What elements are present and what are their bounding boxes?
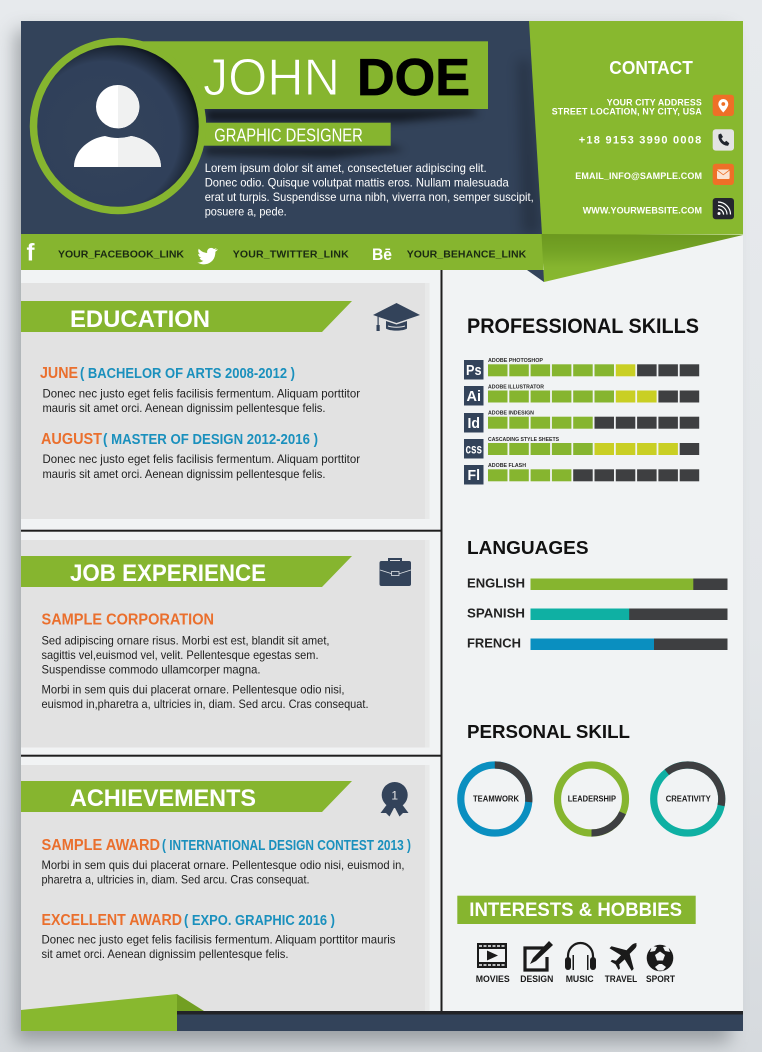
skill: css: css bbox=[466, 442, 482, 456]
language: english: ENGLISH bbox=[467, 576, 525, 591]
entry: sample corporation: sagittis vel,euismod vel, velit. Pellentesque egestas sem. bbox=[42, 648, 318, 662]
intro paragraph: erat ut turpis. Suspendisse urna nibh, viverra non, semper suscipit, bbox=[205, 190, 534, 204]
icon: briefcase bbox=[380, 559, 411, 586]
language: spanish bbox=[467, 606, 728, 621]
skill: flash bbox=[464, 463, 699, 484]
social bar bbox=[21, 234, 544, 282]
icon: sport bbox=[646, 945, 675, 984]
skill: photoshop: Ps bbox=[466, 362, 482, 379]
icon: music: MUSIC bbox=[566, 974, 594, 984]
entry: master: AUGUST bbox=[41, 431, 102, 448]
language: french: FRENCH bbox=[467, 636, 521, 651]
panel: languages bbox=[467, 537, 728, 651]
skill: indesign: Id bbox=[468, 415, 480, 432]
skill: indesign: ADOBE INDESIGN bbox=[488, 411, 534, 417]
icon: twitter bbox=[197, 248, 218, 264]
entry: sample corporation: SAMPLE CORPORATION bbox=[42, 612, 214, 628]
icon: graduation cap bbox=[373, 303, 420, 331]
entry: sample award: Morbi in sem quis dui placerat ornare. Pellentesque odio nisi, euismod in, bbox=[42, 858, 404, 872]
entry: bachelor: Donec nec justo eget felis facilisis fermentum. Aliquam porttitor bbox=[42, 386, 360, 400]
intro paragraph: posuere a, pede. bbox=[205, 204, 287, 218]
intro paragraph: Lorem ipsum dolor sit amet, consectetuer adipiscing elit. bbox=[205, 161, 487, 175]
icon: phone bbox=[713, 129, 734, 151]
entry: sample corporation: euismod in,pharetra a, ultricies in, diam. Sed arcu. Cras consequat. bbox=[42, 697, 368, 711]
skill: illustrator: Ai bbox=[466, 388, 481, 405]
heading banner: INTERESTS & HOBBIES bbox=[469, 900, 682, 921]
heading: JOB EXPERIENCE bbox=[70, 560, 266, 587]
entry: sample award: SAMPLE AWARD bbox=[42, 837, 160, 854]
entry: bachelor: mauris sit amet orci. Aenean dignissim pellentesque felis. bbox=[42, 401, 326, 415]
heading: PERSONAL SKILL bbox=[467, 721, 630, 742]
language: french bbox=[467, 636, 728, 651]
twitter link: YOUR_TWITTER_LINK bbox=[233, 249, 349, 261]
entry: excellent award bbox=[42, 912, 396, 961]
entry: sample corporation: Morbi in sem quis dui placerat ornare. Pellentesque odio nisi, bbox=[42, 682, 344, 696]
icon: email bbox=[713, 164, 734, 185]
entry: bachelor: JUNE bbox=[40, 365, 78, 382]
language: english bbox=[467, 576, 728, 591]
ring: teamwork: TEAMWORK bbox=[473, 795, 519, 804]
skill: css: CASCADING STYLE SHEETS bbox=[488, 437, 559, 443]
heading: EDUCATION bbox=[70, 306, 210, 333]
entry: master bbox=[41, 431, 360, 481]
header panel bbox=[21, 21, 543, 234]
job title: GRAPHIC DESIGNER bbox=[214, 126, 363, 146]
ring: creativity: CREATIVITY bbox=[666, 795, 711, 804]
icon: travel bbox=[605, 943, 638, 984]
icon: facebook: f bbox=[26, 240, 36, 266]
entry: sample award bbox=[42, 837, 411, 886]
heading: ACHIEVEMENTS bbox=[70, 785, 256, 812]
heading: PROFESSIONAL SKILLS bbox=[467, 315, 699, 338]
entry: bachelor bbox=[40, 365, 360, 415]
skill: photoshop: ADOBE PHOTOSHOP bbox=[488, 358, 543, 364]
ring: leadership: LEADERSHIP bbox=[568, 795, 617, 804]
entry: master: mauris sit amet orci. Aenean dignissim pellentesque felis. bbox=[42, 467, 326, 481]
job title ribbon bbox=[190, 123, 391, 146]
entry: bachelor: ( BACHELOR OF ARTS 2008-2012 ) bbox=[80, 366, 295, 382]
panel: interests and hobbies bbox=[457, 896, 696, 984]
behance link: YOUR_BEHANCE_LINK bbox=[407, 249, 527, 261]
icon: behance: Bē bbox=[372, 245, 392, 264]
skill: indesign bbox=[464, 411, 699, 432]
skill: css bbox=[464, 437, 699, 458]
name banner bbox=[140, 41, 488, 109]
address bbox=[552, 97, 702, 117]
icon: award medal bbox=[380, 782, 408, 816]
entry: sample corporation: Suspendisse commodo ullamcorper magna. bbox=[42, 662, 260, 676]
entry: excellent award: Donec nec justo eget felis facilisis fermentum. Aliquam porttitor mauris bbox=[42, 932, 396, 946]
icon: movies: MOVIES bbox=[476, 974, 510, 984]
entry: excellent award: EXCELLENT AWARD bbox=[42, 912, 182, 929]
skill: illustrator: ADOBE ILLUSTRATOR bbox=[488, 385, 544, 391]
profile portrait bbox=[34, 42, 202, 210]
icon: sport: SPORT bbox=[646, 974, 675, 984]
entry: excellent award: ( EXPO. GRAPHIC 2016 ) bbox=[184, 913, 335, 929]
section banner bbox=[21, 781, 352, 812]
entry: sample corporation bbox=[42, 612, 368, 711]
footer strip bbox=[21, 994, 743, 1031]
ring: teamwork bbox=[461, 765, 529, 833]
panel: professional skills bbox=[464, 315, 699, 484]
entry: sample award: ( INTERNATIONAL DESIGN CONTEST 2013 ) bbox=[162, 838, 411, 854]
address: STREET LOCATION, NY CITY, USA bbox=[552, 107, 702, 117]
panel: achievements bbox=[21, 765, 430, 1012]
contact heading: CONTACT bbox=[609, 58, 693, 78]
panel: personal skill bbox=[461, 721, 722, 833]
heading banner bbox=[457, 896, 696, 924]
entry: sample corporation: Sed adipiscing ornare risus. Morbi est est, blandit sit amet, bbox=[42, 634, 330, 648]
skill: flash: ADOBE FLASH bbox=[488, 463, 526, 469]
entry: master: ( MASTER OF DESIGN 2012-2016 ) bbox=[103, 432, 318, 448]
icon: rss bbox=[713, 198, 734, 219]
icon: award medal: 1 bbox=[391, 788, 398, 802]
website: WWW.YOURWEBSITE.COM bbox=[583, 205, 702, 215]
section banner bbox=[21, 301, 352, 332]
entry: master: Donec nec justo eget felis facilisis fermentum. Aliquam porttitor bbox=[42, 452, 360, 466]
section banner bbox=[21, 556, 352, 587]
intro paragraph: Donec odio. Quisque volutpat mattis eros. Nullam malesuada bbox=[205, 176, 509, 190]
intro paragraph bbox=[205, 161, 534, 218]
phone: +18 9153 3990 0008 bbox=[579, 134, 701, 146]
icon: movies bbox=[476, 943, 510, 984]
panel: job experience bbox=[21, 540, 430, 748]
first name: JOHN bbox=[203, 49, 340, 107]
skill: flash: Fl bbox=[468, 467, 480, 484]
icon: location bbox=[713, 95, 734, 116]
skill: illustrator bbox=[464, 385, 699, 406]
ring: creativity bbox=[654, 765, 722, 833]
divider lines bbox=[21, 270, 442, 1012]
heading: LANGUAGES bbox=[467, 537, 588, 558]
email: EMAIL_INFO@SAMPLE.COM bbox=[575, 171, 702, 181]
icon: design: DESIGN bbox=[520, 974, 553, 984]
entry: sample award: pharetra a, ultricies in, diam. Sed arcu. Cras consequat. bbox=[42, 872, 310, 886]
entry: excellent award: sit amet orci. Aenean dignissim pellentesque felis. bbox=[42, 947, 288, 961]
panel: education bbox=[21, 283, 430, 519]
skill: photoshop bbox=[464, 358, 699, 380]
ring: leadership bbox=[558, 765, 626, 833]
facebook link: YOUR_FACEBOOK_LINK bbox=[58, 249, 184, 261]
icon: travel: TRAVEL bbox=[605, 974, 638, 984]
last name: DOE bbox=[357, 49, 470, 107]
address: YOUR CITY ADDRESS bbox=[607, 97, 702, 107]
contact panel bbox=[529, 21, 743, 282]
language: spanish: SPANISH bbox=[467, 606, 525, 621]
icon: music bbox=[565, 943, 596, 984]
icon: design bbox=[520, 941, 553, 984]
